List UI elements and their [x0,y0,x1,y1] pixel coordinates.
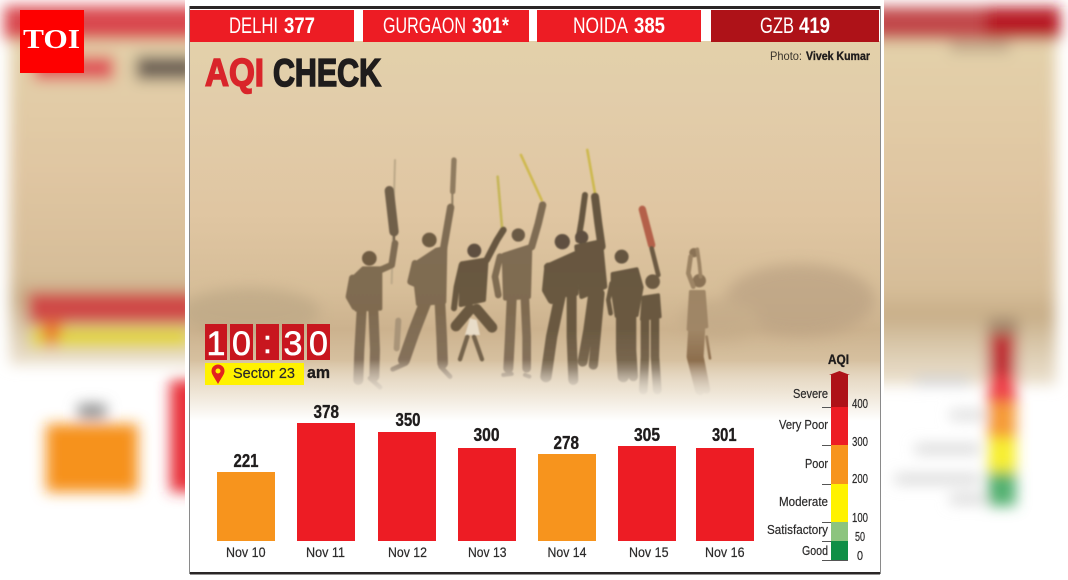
clock: 10:30 am: 0 [232,325,251,363]
legend: AQI scale: 100 [852,510,868,525]
bar: Nov 10 [217,451,275,560]
legend: AQI scale: Very Poor [779,417,829,432]
clock: 10:30 am: 0 [309,325,328,363]
card right edge [880,6,881,574]
city tab: Noida: 385 [634,13,665,38]
bar: Nov 11: 378 [314,402,339,422]
bar: Nov 15: 305 [634,425,660,445]
bar chart: daily AQI [217,402,754,560]
city tab: GZB: 419 [799,13,830,38]
bar: Nov 14: 278 [554,433,579,453]
photo credit: Photo: [770,49,802,63]
title: AQI Check [205,52,381,95]
clock: 10:30 am: 1 [207,325,225,363]
legend: AQI scale: 50 [855,529,865,544]
bar: Nov 16 [696,425,754,560]
logo: TOI [20,10,84,73]
city tab: Gurgaon: GURGAON [383,13,466,38]
legend: AQI scale: Satisfactory [767,522,828,537]
legend: AQI scale: Severe [793,386,828,401]
clock: 10:30 am: : [263,324,272,360]
bar: Nov 13: 300 [474,425,500,445]
panel: infographic card [180,0,884,580]
location tag: Sector 23 [205,363,304,385]
top rule [190,6,880,9]
city tab: Delhi [190,10,354,42]
bar: Nov 13 [458,425,516,560]
background: blurred right strip [870,7,1060,506]
title: AQI Check: AQI [205,52,264,95]
bar: Nov 10: Nov 10 [226,544,266,560]
bar: Nov 16: Nov 16 [705,544,745,560]
bar: Nov 11: Nov 11 [306,544,345,560]
city tab: GZB: GZB [760,13,794,38]
bar: Nov 14: Nov 14 [548,544,587,560]
city tab: Noida [537,10,701,42]
bar: Nov 12 [378,410,436,560]
legend: AQI scale: Moderate [779,494,828,509]
city tab: Noida: NOIDA [573,13,628,38]
bar: Nov 12: 350 [396,410,420,430]
legend: AQI scale [767,351,868,563]
bar: Nov 14 [538,433,596,560]
clock: 10:30 am: 3 [284,325,302,363]
title: AQI Check: CHECK [273,52,381,95]
bar: Nov 15: Nov 15 [629,544,669,560]
location tag: Sector 23: Sector 23 [233,365,295,382]
city tab: Delhi: 377 [284,13,315,38]
clock: 10:30 am: am [307,363,330,382]
photo credit [770,49,870,63]
legend: AQI scale: Poor [805,456,829,471]
city tab: Delhi: DELHI [229,13,278,38]
legend: AQI scale: 200 [852,471,868,486]
bottom rule [190,572,880,574]
legend: AQI scale: Good [802,543,828,558]
legend: AQI scale: 0 [857,548,863,563]
bar: Nov 13: Nov 13 [468,544,507,560]
bar: Nov 16: 301 [712,425,736,445]
legend: AQI scale: AQI [828,351,849,367]
legend: AQI scale: 300 [852,434,868,449]
bar: Nov 15 [618,425,676,560]
photo credit: Vivek Kumar [806,49,870,63]
city tab: Gurgaon: 301* [472,13,509,38]
logo: TOI: TOI [23,24,80,54]
icon: map pin [212,364,224,384]
bar: Nov 12: Nov 12 [388,544,427,560]
city tab: Gurgaon [363,10,529,42]
card left edge [189,6,190,574]
background: blurred left strip [4,6,200,492]
bar: Nov 11 [297,402,355,560]
legend: AQI scale: 400 [852,396,868,411]
photo: cricket players in smog [180,41,880,421]
bar: Nov 10: 221 [234,451,258,471]
city tab: GZB [711,10,879,42]
scale arrow cap [829,371,850,407]
clock: 10:30 am [205,324,330,382]
